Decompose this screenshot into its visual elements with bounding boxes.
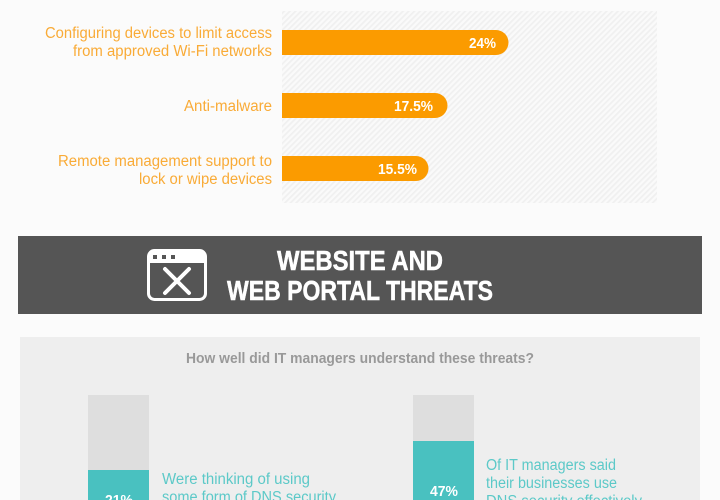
panel heading: How well did IT managers understand these threats? xyxy=(186,351,534,367)
label: configuring devices xyxy=(45,25,272,60)
icon: browser window with X xyxy=(148,250,206,300)
bar: anti-malware 17.5% xyxy=(282,93,447,118)
panel: IT manager understanding xyxy=(20,337,700,500)
panel: bar chart of device security measures xyxy=(45,11,657,203)
bar: remote management 15.5%: 15.5% xyxy=(378,161,417,178)
stat column: 21% xyxy=(88,395,149,500)
stat text: DNS security use xyxy=(486,457,642,500)
banner title xyxy=(227,245,493,306)
banner title: WEB PORTAL THREATS xyxy=(227,275,493,306)
bar: anti-malware 17.5%: 17.5% xyxy=(394,98,433,115)
stat column: 47%: 47% xyxy=(430,483,458,500)
banner title: WEBSITE AND xyxy=(277,245,443,276)
bar: configuring devices 24%: 24% xyxy=(469,35,496,52)
label: remote management xyxy=(58,153,272,188)
label: anti-malware: Anti-malware xyxy=(184,98,272,115)
label: configuring devices: from approved Wi-Fi networks xyxy=(73,43,272,60)
stat text: DNS security thinking xyxy=(162,471,336,500)
chart background hatch xyxy=(282,11,657,203)
label: remote management: Remote management support to xyxy=(58,153,272,170)
bar: remote management 15.5% xyxy=(282,156,428,181)
bar: configuring devices 24% xyxy=(282,30,508,55)
section banner xyxy=(18,236,702,314)
stat text: DNS security thinking: Were thinking of using xyxy=(162,471,310,488)
label: remote management: lock or wipe devices xyxy=(139,171,272,188)
label: configuring devices: Configuring devices to limit access xyxy=(45,25,272,42)
stat text: DNS security use: their businesses use xyxy=(486,475,617,492)
stat column: 47% xyxy=(413,395,474,500)
stat text: DNS security use: Of IT managers said xyxy=(486,457,616,474)
